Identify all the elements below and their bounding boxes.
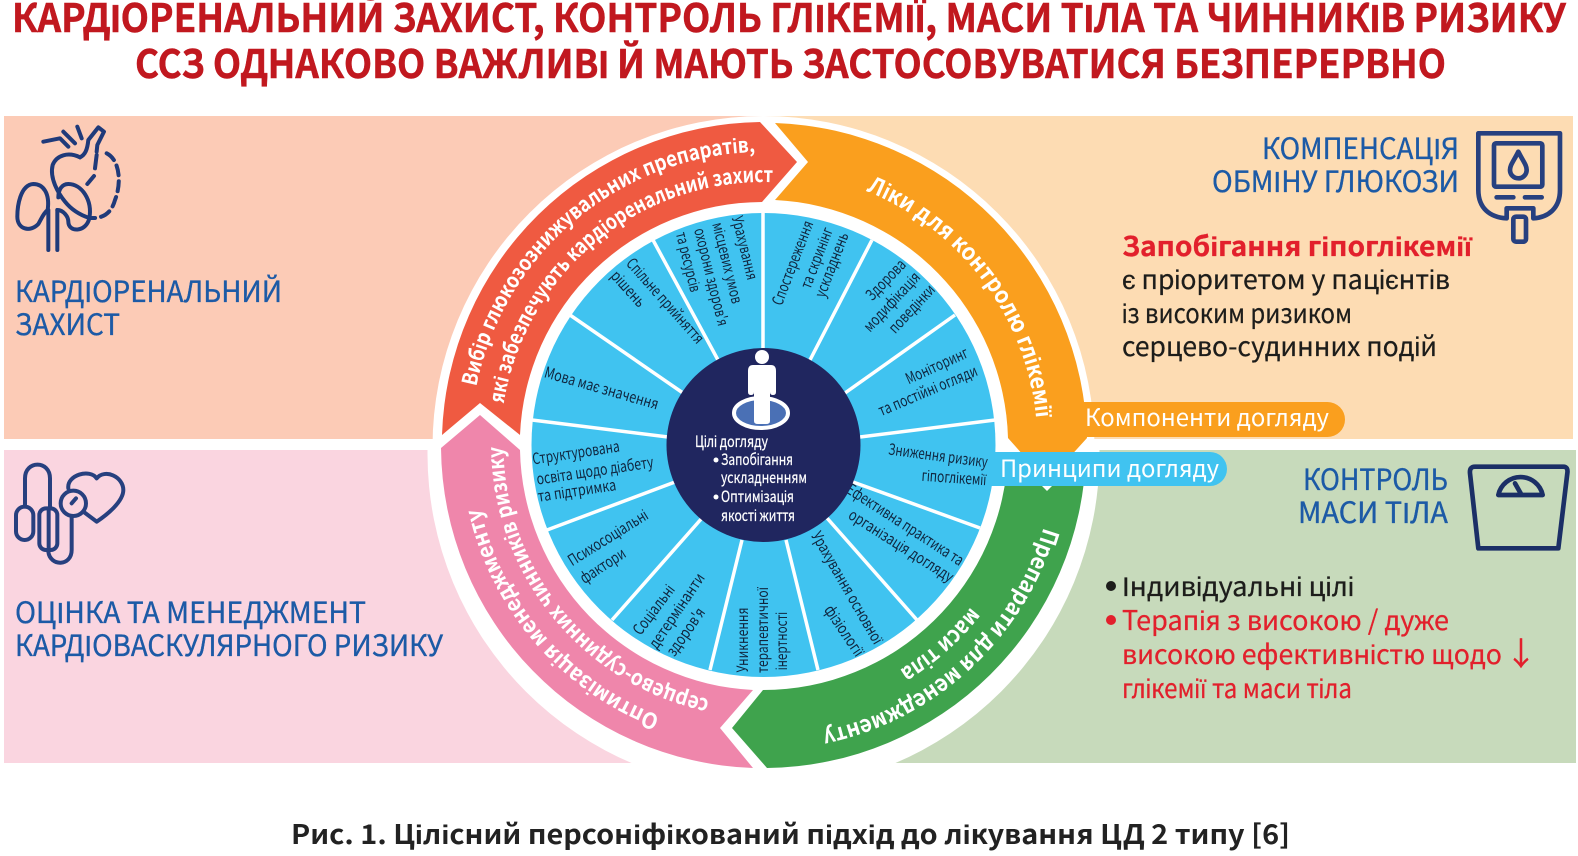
sector: social determinants: Соціальні bbox=[627, 580, 679, 639]
centre: goals of care: якості життя bbox=[721, 504, 795, 526]
sector: therapeutic inertia: терапевтичної bbox=[751, 586, 773, 673]
sector: shared decision making: рішень bbox=[606, 265, 651, 312]
arrow segment: cardiovascular risk factor management: серцево-судинних чинників ризику bbox=[491, 447, 708, 710]
heading: weight control: МАСИ ТІЛА bbox=[1298, 490, 1448, 532]
sector: language matters: Мова має значення bbox=[542, 361, 662, 414]
sector: hypoglycemia risk reduction: Зниження ризику bbox=[887, 438, 989, 472]
heading: cardiorenal protection: ЗАХИСТ bbox=[15, 302, 120, 344]
title bbox=[12, 0, 1567, 90]
sector: psychosocial factors: Психосоціальні bbox=[563, 504, 652, 571]
label: principles of care: Принципи догляду bbox=[1000, 449, 1219, 484]
heading: glucose compensation: ОБМІНУ ГЛЮКОЗИ bbox=[1212, 159, 1459, 201]
sector: hypoglycemia risk reduction bbox=[887, 438, 989, 490]
sector: psychosocial factors bbox=[563, 504, 652, 588]
heading: glucose compensation bbox=[1212, 126, 1459, 201]
sector: local conditions: та ресурсів bbox=[671, 230, 707, 294]
icon: weighing scale bbox=[1470, 467, 1567, 548]
sector: therapeutic inertia: Уникнення bbox=[731, 608, 753, 672]
sector: monitoring: Моніторинг bbox=[902, 341, 972, 389]
wheel spokes bbox=[532, 213, 995, 670]
sector: social determinants bbox=[627, 568, 710, 660]
text block: hypoglycemia prevention: Запобігання гіпоглікемії bbox=[1122, 225, 1473, 264]
label: components of care: Компоненти догляду bbox=[1085, 398, 1329, 433]
sector: underlying physiology: Урахування основної bbox=[807, 527, 889, 648]
icon: blood pressure monitor and heart bbox=[16, 465, 123, 563]
caption: Рис. 1. Цілісний персоніфікований підхід до лікування ЦД 2 типу [6] bbox=[291, 813, 1290, 852]
text block: hypoglycemia prevention: із високим ризиком bbox=[1122, 292, 1352, 331]
sector: therapeutic inertia bbox=[731, 586, 792, 673]
sector: local conditions bbox=[671, 214, 764, 328]
text block: weight control bullets: ↓ bbox=[1505, 629, 1537, 675]
heading: cardiovascular risk: КАРДІОВАСКУЛЯРНОГО РИЗИКУ bbox=[15, 623, 443, 665]
sector: therapeutic inertia: інертності bbox=[770, 612, 792, 670]
centre: goals of care: Оптимізація bbox=[721, 485, 794, 507]
text block: hypoglycemia prevention: серцево-судинних подій bbox=[1122, 325, 1437, 364]
centre: goals of care: Цілі догляду bbox=[695, 430, 768, 452]
icon: heart and kidneys bbox=[17, 127, 119, 250]
sector: local conditions: місцевих умов bbox=[707, 220, 749, 306]
panel: cardiorenal protection background bbox=[4, 116, 774, 439]
sector: complications screening: та скринінг bbox=[794, 224, 838, 291]
sector: shared decision making bbox=[606, 253, 710, 348]
sector: social determinants: здоров'я bbox=[660, 603, 710, 660]
panel: cardiovascular risk background bbox=[4, 450, 774, 763]
heading: cardiovascular risk bbox=[15, 590, 443, 665]
sector: healthy behaviour change: Здорова bbox=[860, 254, 911, 305]
sector: structured education bbox=[531, 435, 655, 507]
panel: glucose compensation background bbox=[770, 116, 1573, 439]
sector: complications screening: ускладнень bbox=[809, 229, 854, 300]
sector: structured education: освіта щодо діабету bbox=[535, 450, 655, 490]
sector: psychosocial factors: фактори bbox=[575, 542, 630, 588]
icon: standing person bbox=[734, 350, 788, 428]
arrow segment: weight management drugs: Препарати для менеджменту bbox=[825, 529, 1060, 744]
arrow segment: cardiorenal drug choice: які забезпечують кардіоренальний захист bbox=[492, 170, 773, 404]
centre: goals of care: Запобігання bbox=[721, 448, 793, 470]
sector: shared decision making: Спільне прийняття bbox=[622, 253, 710, 348]
sector: complications screening bbox=[766, 217, 854, 308]
arrow segment: cardiovascular risk factor management: Оптимізація менеджменту bbox=[468, 511, 657, 729]
title: ССЗ ОДНАКОВО ВАЖЛИВІ Й МАЮТЬ ЗАСТОСОВУВАТИСЯ БЕЗПЕРЕРВНО bbox=[135, 34, 1446, 90]
arrow segment: glycemic control drugs bbox=[775, 123, 1087, 452]
sector: underlying physiology: фізіології bbox=[819, 600, 870, 661]
heading: cardiovascular risk: ОЦІНКА ТА МЕНЕДЖМЕНТ bbox=[15, 590, 366, 632]
arrow segment: cardiovascular risk factor management bbox=[441, 415, 753, 768]
sector: healthy behaviour change: модифікація bbox=[858, 266, 925, 336]
heading: cardiorenal protection: КАРДІОРЕНАЛЬНИЙ bbox=[15, 269, 282, 311]
centre: goals of care: ускладненням bbox=[721, 466, 807, 488]
sector: effective practice: Ефективна практика та bbox=[843, 478, 969, 570]
text block: weight control bullets: Терапія з високою / дуже bbox=[1122, 599, 1449, 638]
heading: weight control bbox=[1298, 457, 1448, 532]
sector: social determinants: детермінанти bbox=[643, 568, 710, 653]
sector: healthy behaviour change: поведінки bbox=[883, 279, 940, 338]
sector: structured education: та підтримка bbox=[536, 473, 618, 507]
arrow segment: cardiorenal drug choice: Вибір глюкозознижувальних препаратів, bbox=[461, 138, 754, 385]
arrow segment: weight management drugs bbox=[732, 486, 1084, 768]
text block: weight control bullets: Індивідуальні цілі bbox=[1122, 565, 1354, 604]
icon: glucose meter bbox=[1478, 133, 1560, 242]
sector: hypoglycemia risk reduction: гіпоглікемії bbox=[921, 464, 988, 490]
blue disc of care principles bbox=[532, 213, 996, 677]
panel: weight control background bbox=[770, 450, 1576, 763]
white ring behind wheel bbox=[428, 116, 1100, 790]
sector: structured education: Структурована bbox=[531, 435, 621, 469]
sector: monitoring: та постійні огляди bbox=[875, 359, 981, 421]
sector: effective practice: організація догляду bbox=[845, 503, 958, 587]
heading: cardiorenal protection bbox=[15, 269, 282, 344]
sector: local conditions: охорони здоров'я bbox=[689, 226, 735, 328]
arrow segment: weight management drugs: маси тіла bbox=[900, 608, 980, 679]
arrow segment: glycemic control drugs: Ліки для контролю глікемії bbox=[866, 177, 1052, 417]
sector: local conditions: Урахування bbox=[727, 214, 764, 282]
text block: hypoglycemia prevention: є пріоритетом у пацієнтів bbox=[1122, 258, 1450, 297]
text block: weight control bullets: глікемії та маси тіла bbox=[1122, 667, 1352, 706]
heading: weight control: КОНТРОЛЬ bbox=[1303, 457, 1448, 499]
text block: weight control bullets bbox=[1106, 565, 1537, 706]
heading: glucose compensation: КОМПЕНСАЦІЯ bbox=[1262, 126, 1459, 168]
centre: goals of care bbox=[666, 348, 860, 542]
text block: hypoglycemia prevention bbox=[1122, 225, 1473, 364]
text block: weight control bullets: високою ефективністю щодо bbox=[1122, 633, 1502, 672]
sector: complications screening: Спостереження bbox=[766, 217, 818, 308]
